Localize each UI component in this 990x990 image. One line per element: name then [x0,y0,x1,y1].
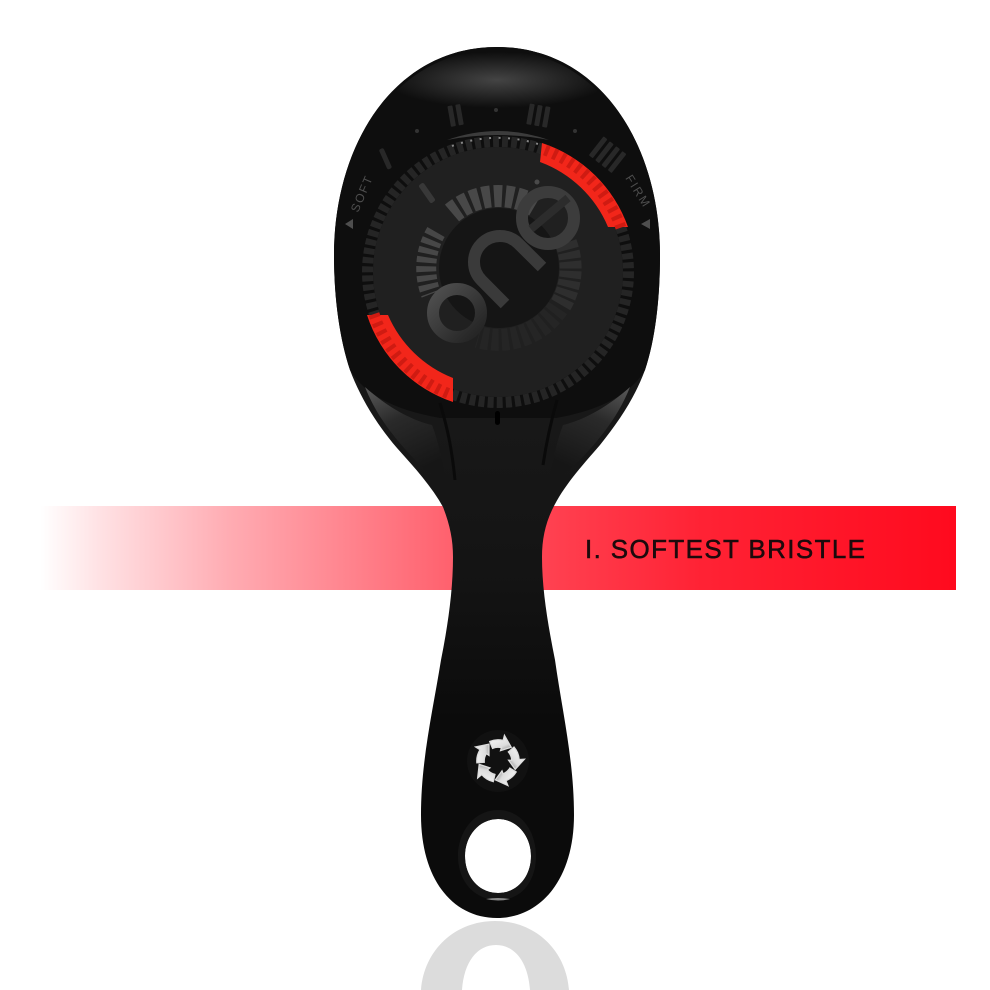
one logo [433,192,574,337]
SOFT label: SOFT [348,173,376,214]
firm arrow [641,219,650,229]
numeral IIII [589,136,626,173]
rim highlight [486,898,510,900]
radial ticks: top arc [452,196,535,213]
letter e crossbar [531,198,568,229]
recycling emblem [467,730,529,792]
top head highlight [404,56,590,104]
dial face [373,147,623,397]
letter n [474,236,542,304]
scale dots [415,108,577,133]
FIRM label: FIRM [622,172,654,211]
reflection of brush handle [421,921,569,990]
red grip: soft side [367,314,453,402]
pointer mark on dial [418,182,436,204]
dial [362,136,634,408]
red gradient band [40,506,956,590]
soft arrow [345,219,353,229]
brush silhouette [334,47,660,918]
small dot on dial [534,180,540,184]
firmness scale markings [379,103,626,173]
letter o [433,289,481,337]
red grip: firm side [540,143,628,231]
central dark disc [439,208,559,328]
band label: I. SOFTEST BRISTLE [585,534,865,564]
dial base with teeth [362,136,634,408]
numeral III [526,103,551,128]
top arc highlight of dial [447,131,549,140]
numeral I [379,148,392,170]
left shoulder highlight [365,387,446,482]
hanging hole rim [458,810,536,900]
right channel groove [543,400,557,465]
radial ticks: left arc [426,232,436,294]
small notch below dial [495,411,500,425]
knurled teeth [368,142,628,402]
emblem recess [467,730,529,792]
left channel groove [440,403,455,480]
emblem arrows [469,733,525,789]
radial ticks: right arc [560,243,571,306]
brush head face [334,47,660,418]
right shoulder highlight [549,387,630,482]
radial ticks: bottom arc [478,308,558,340]
numeral II [447,104,464,127]
bright top dots [452,138,538,146]
hairbrush [334,47,660,918]
letter e [522,192,574,244]
